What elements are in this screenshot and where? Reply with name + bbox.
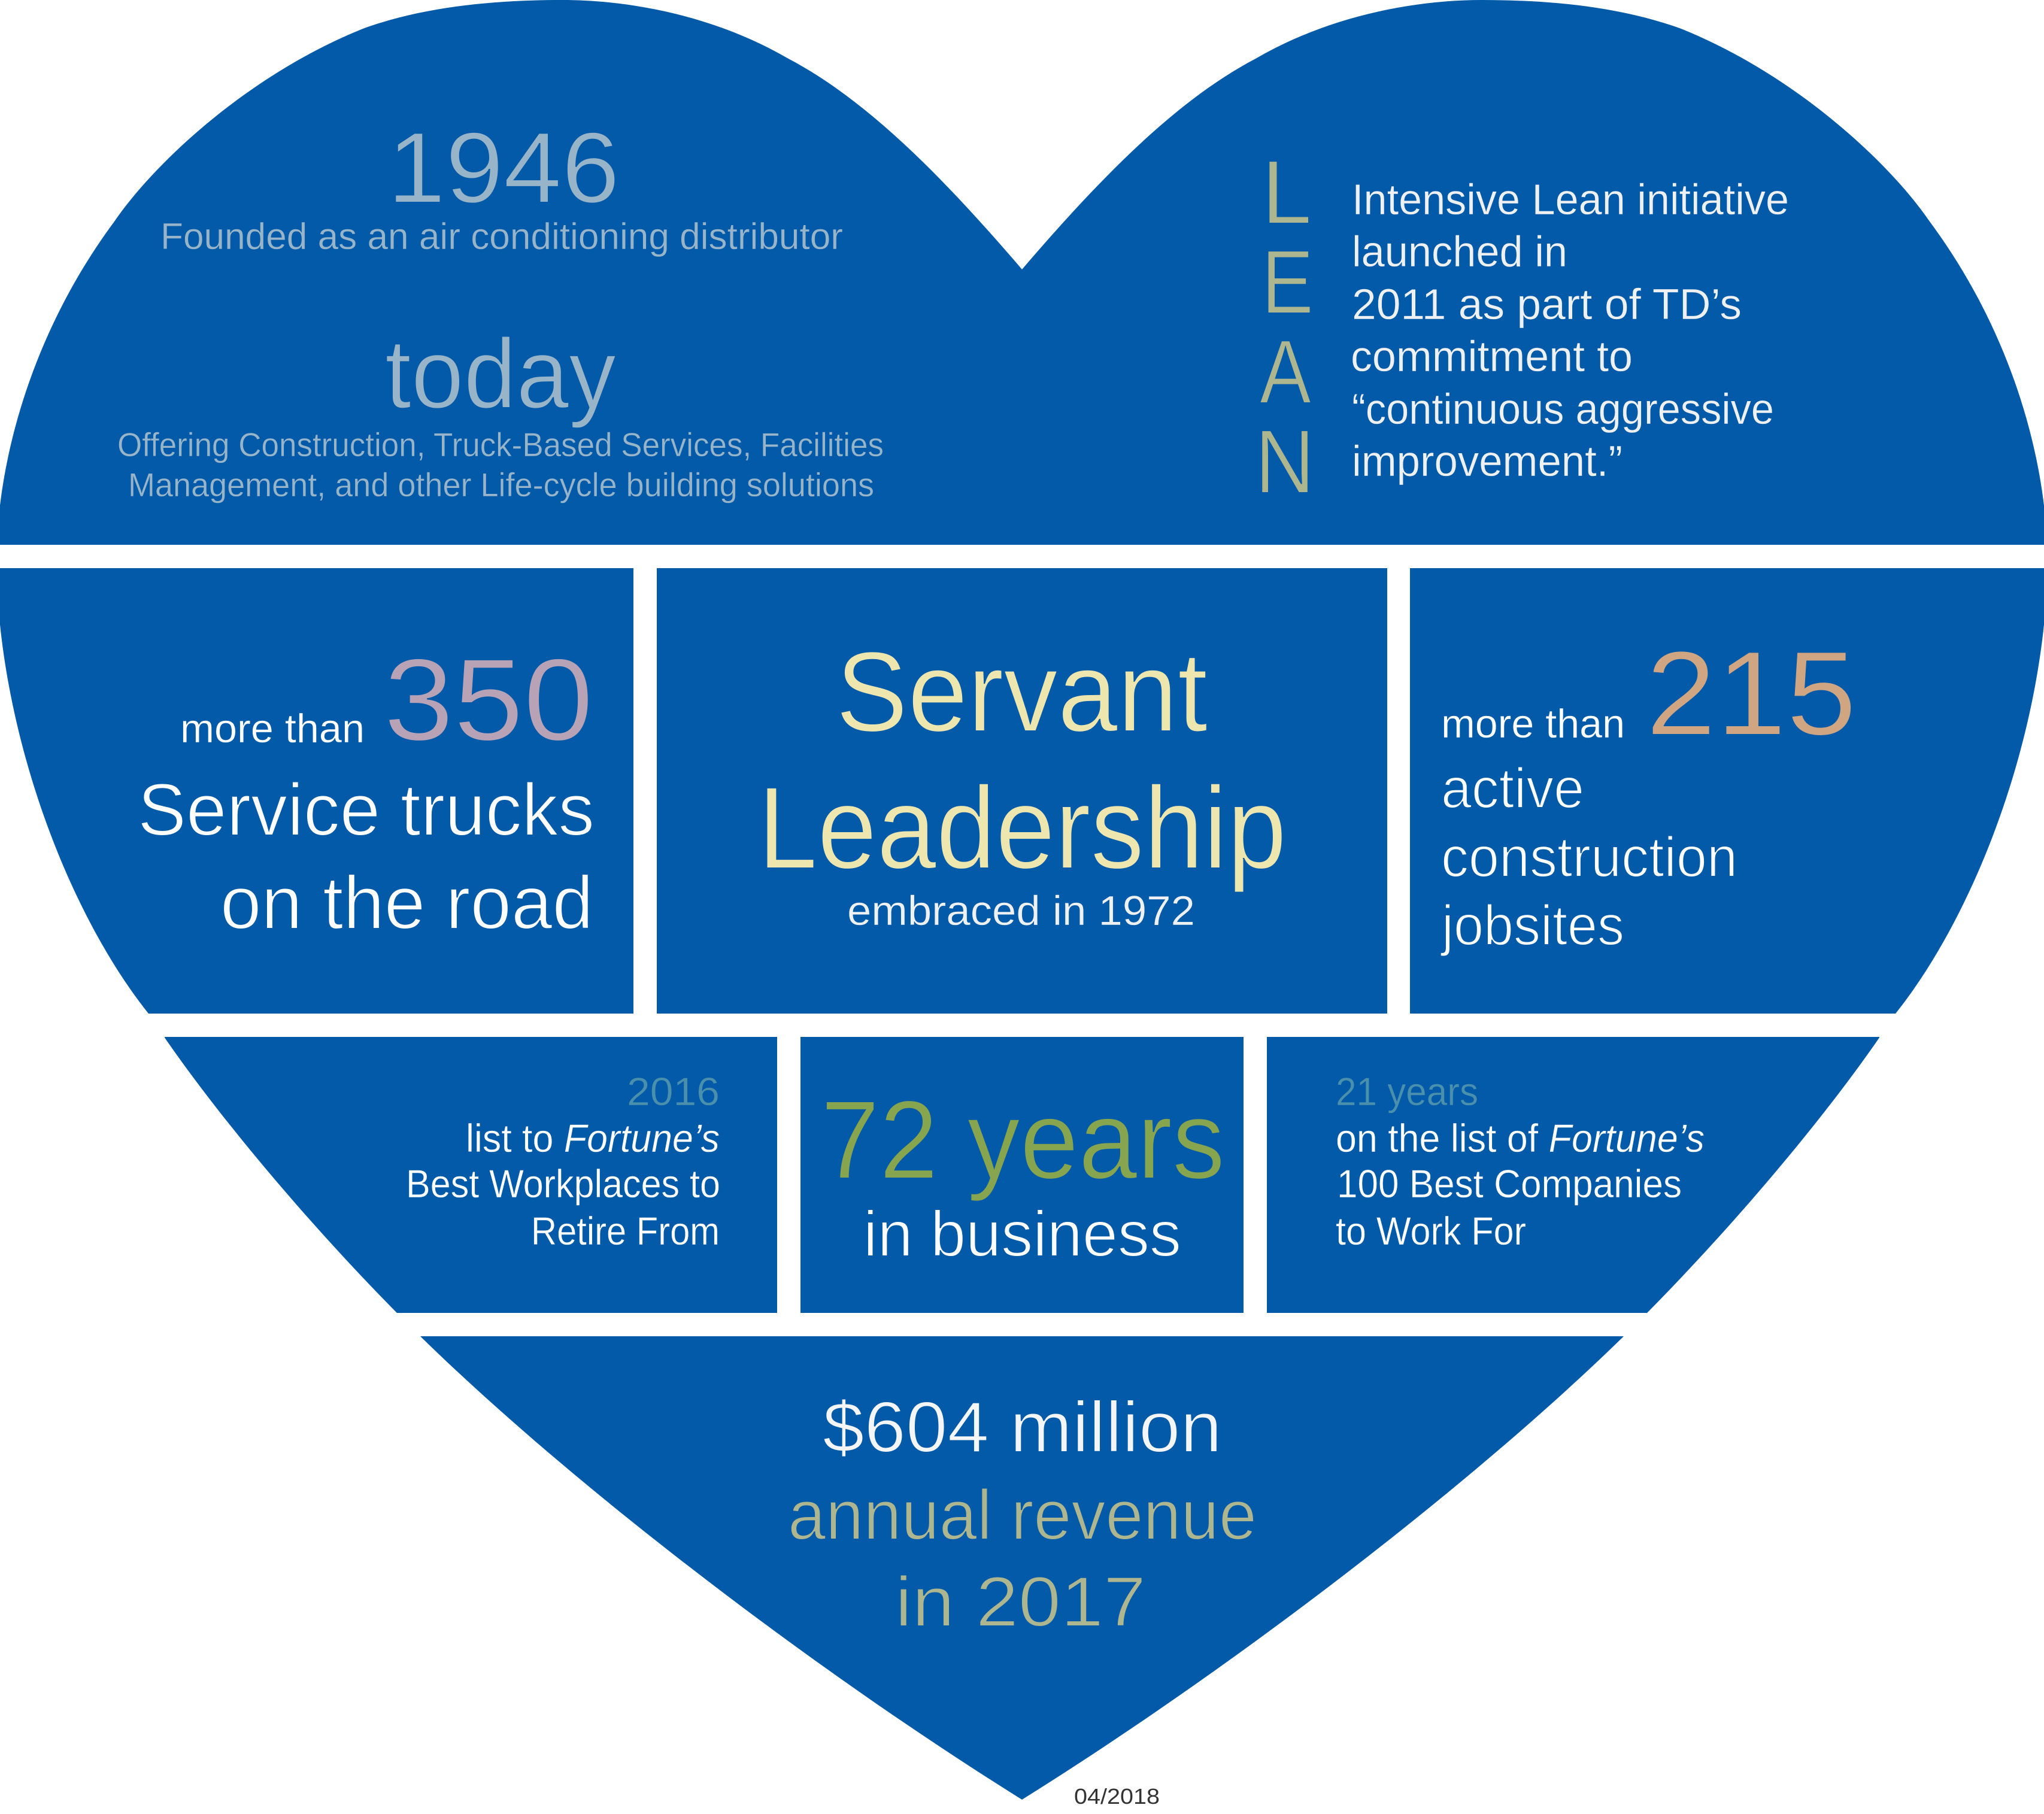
- panel shape: [165, 1037, 777, 1313]
- number 350: 350: [384, 635, 593, 765]
- today description: [117, 426, 884, 503]
- fortune list text: [1336, 1116, 1705, 1253]
- lean description: commitment to: [1351, 333, 1633, 381]
- jobsites text: [1440, 757, 1737, 957]
- panel shape: [1410, 568, 2044, 1014]
- panel: 100 best companies: [1267, 1037, 1879, 1313]
- panel: heart top: [0, 0, 2044, 545]
- servant leadership heading: Servant: [836, 629, 1208, 756]
- 72 years: 72 years: [821, 1078, 1225, 1202]
- panel: servant leadership: [657, 568, 1387, 1014]
- vertical LEAN heading: L: [1261, 141, 1312, 242]
- more than label: more than: [1441, 701, 1625, 747]
- panel shape: [1267, 1037, 1879, 1313]
- fortune list text: 100 Best Companies: [1337, 1161, 1682, 1206]
- panel shape: [657, 568, 1387, 1014]
- fortune list text: [406, 1116, 720, 1253]
- servant leadership heading: [758, 629, 1287, 893]
- lean description: launched in: [1352, 228, 1567, 276]
- service trucks text: Service trucks: [138, 769, 595, 851]
- top lobes shape: [0, 0, 2044, 545]
- vertical LEAN heading: [1255, 141, 1315, 512]
- annual revenue text: in 2017: [895, 1563, 1146, 1642]
- vertical LEAN heading: A: [1260, 321, 1311, 422]
- year 2016: 2016: [627, 1069, 720, 1114]
- panel shape: [0, 568, 633, 1014]
- jobsites text: jobsites: [1440, 894, 1624, 957]
- fortune list text: list to Fortune’s: [466, 1116, 720, 1160]
- embraced text: embraced in 1972: [847, 887, 1195, 934]
- panel: service trucks: [0, 568, 633, 1014]
- fortune list text: on the list of Fortune’s: [1336, 1116, 1705, 1160]
- panel: construction jobsites: [1410, 568, 2044, 1014]
- lean description: 2011 as part of TD’s: [1352, 281, 1742, 329]
- panel: years in business: [800, 1037, 1244, 1313]
- annual revenue text: annual revenue: [788, 1476, 1257, 1555]
- lean description: improvement.”: [1352, 438, 1623, 486]
- panel: service trucks: on the road: [220, 862, 593, 945]
- vertical LEAN heading: N: [1255, 411, 1315, 512]
- servant leadership heading: Leadership: [758, 763, 1287, 893]
- fortune list text: to Work For: [1336, 1209, 1526, 1253]
- more than label: more than: [180, 706, 365, 751]
- fortune list text: Best Workplaces to: [406, 1161, 720, 1206]
- jobsites text: construction: [1441, 826, 1737, 889]
- 21 years: 21 years: [1336, 1069, 1478, 1114]
- vertical LEAN heading: E: [1261, 231, 1314, 332]
- panel: annual revenue: [420, 1336, 1624, 1800]
- panel shape: [420, 1336, 1624, 1800]
- panel: best workplaces to retire: [165, 1037, 777, 1313]
- annual revenue text: [788, 1476, 1257, 1642]
- fortune list text: Retire From: [531, 1209, 720, 1253]
- in business: in business: [863, 1197, 1181, 1270]
- date stamp: 04/2018: [1074, 1784, 1160, 1809]
- today description: Management, and other Life-cycle building solutions: [128, 466, 874, 503]
- year 1946: 1946: [387, 111, 620, 224]
- panel shape: [800, 1037, 1244, 1313]
- today heading: today: [385, 318, 616, 429]
- lean description: [1351, 176, 1789, 486]
- jobsites text: active: [1441, 757, 1584, 820]
- revenue amount: $604 million: [823, 1387, 1222, 1467]
- lean description: Intensive Lean initiative: [1352, 176, 1789, 224]
- founded text: Founded as an air conditioning distributor: [160, 216, 843, 257]
- lean description: “continuous aggressive: [1352, 386, 1774, 433]
- today description: Offering Construction, Truck-Based Services, Facilities: [117, 426, 884, 463]
- number 215: 215: [1646, 627, 1857, 760]
